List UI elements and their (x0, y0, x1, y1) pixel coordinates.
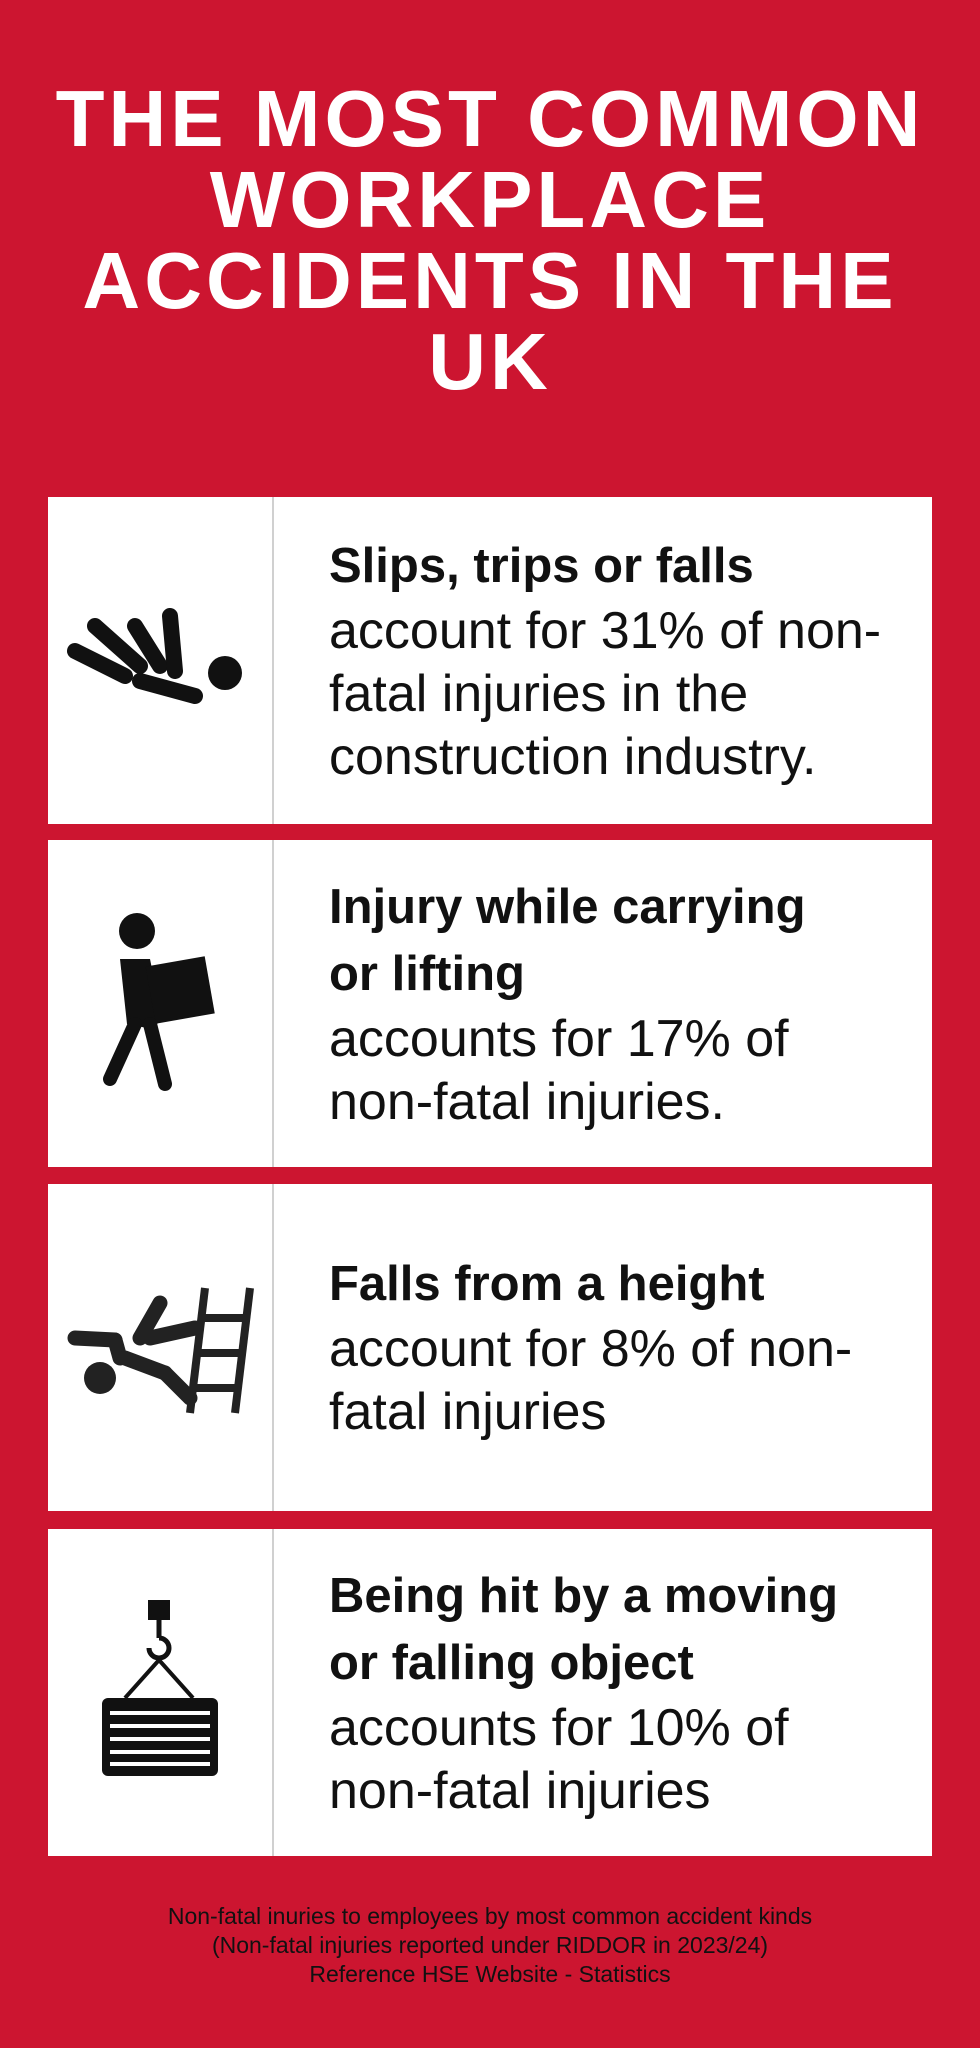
title: THE MOST COMMON (56, 74, 924, 163)
text: non-fatal injuries. (329, 1072, 725, 1130)
title: UK (428, 317, 552, 406)
text: Falls from a height (329, 1257, 765, 1311)
text: accounts for 10% of (329, 1698, 789, 1756)
panel: falls from height (48, 1184, 932, 1511)
text: Being hit by a moving (329, 1568, 838, 1622)
icon: person carrying box (103, 913, 215, 1091)
text: non-fatal injuries (329, 1762, 711, 1820)
text (329, 1568, 838, 1820)
footer: (Non-fatal injuries reported under RIDDOR in 2023/24) (212, 1932, 768, 1958)
text: fatal injuries (329, 1383, 606, 1441)
text: or lifting (329, 946, 525, 1000)
text: fatal injuries in the (329, 664, 748, 722)
icon: falling person (67, 608, 242, 704)
text (329, 1257, 852, 1441)
title (56, 74, 924, 406)
footer (168, 1903, 812, 1987)
footer: Non-fatal inuries to employees by most common accident kinds (168, 1903, 812, 1929)
text (329, 538, 881, 786)
text: accounts for 17% of (329, 1010, 789, 1068)
text: construction industry. (329, 728, 816, 786)
icon: fall from ladder (68, 1288, 254, 1414)
title: ACCIDENTS IN THE (82, 236, 898, 325)
text: Injury while carrying (329, 880, 806, 934)
footer: Reference HSE Website - Statistics (309, 1961, 671, 1987)
title: WORKPLACE (210, 155, 770, 244)
text: or falling object (329, 1636, 694, 1690)
text (329, 880, 806, 1130)
icon: crane hook load (102, 1600, 218, 1776)
text: account for 8% of non- (329, 1320, 852, 1378)
panel: slips trips falls (48, 497, 932, 824)
text: account for 31% of non- (329, 602, 881, 660)
panel: hit by object (48, 1529, 932, 1856)
text: Slips, trips or falls (329, 538, 754, 592)
panel: carrying lifting (48, 840, 932, 1167)
